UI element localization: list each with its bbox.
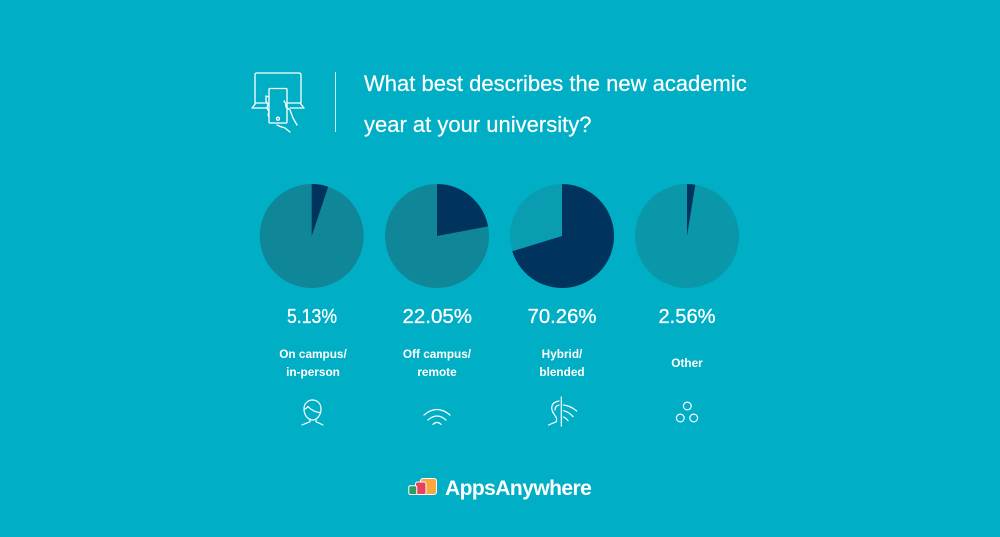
percentage values: 5.13% [287,306,337,328]
icon: laptop and phone in hand [252,73,304,132]
header divider [335,72,336,132]
pie chart: hybrid [510,184,614,288]
title: What best describes the new academic [364,71,747,96]
icon: person [302,400,323,425]
category labels: Other [671,356,703,370]
percentage values: 70.26% [528,306,597,328]
percentage values [287,306,716,328]
icon: three circles [676,402,698,422]
category labels: blended [539,365,585,379]
percentage values: 2.56% [658,306,716,328]
pie chart: on campus [260,184,364,288]
logo mark [409,478,436,494]
logo: AppsAnywhere [409,477,591,500]
pie chart: other [635,184,739,288]
title [364,71,747,137]
category labels: Off campus/ [403,347,472,361]
title: year at your university? [364,112,591,137]
logo wordmark: AppsAnywhere [445,477,591,500]
category labels: Hybrid/ [542,347,583,361]
icon: wifi [424,410,450,424]
category labels: On campus/ [279,347,347,361]
category labels: remote [417,365,457,379]
category labels: in-person [286,365,340,379]
icon: half person half wifi [548,397,577,426]
percentage values: 22.05% [402,306,472,328]
category labels [279,347,703,379]
pie chart: off campus [385,184,489,288]
